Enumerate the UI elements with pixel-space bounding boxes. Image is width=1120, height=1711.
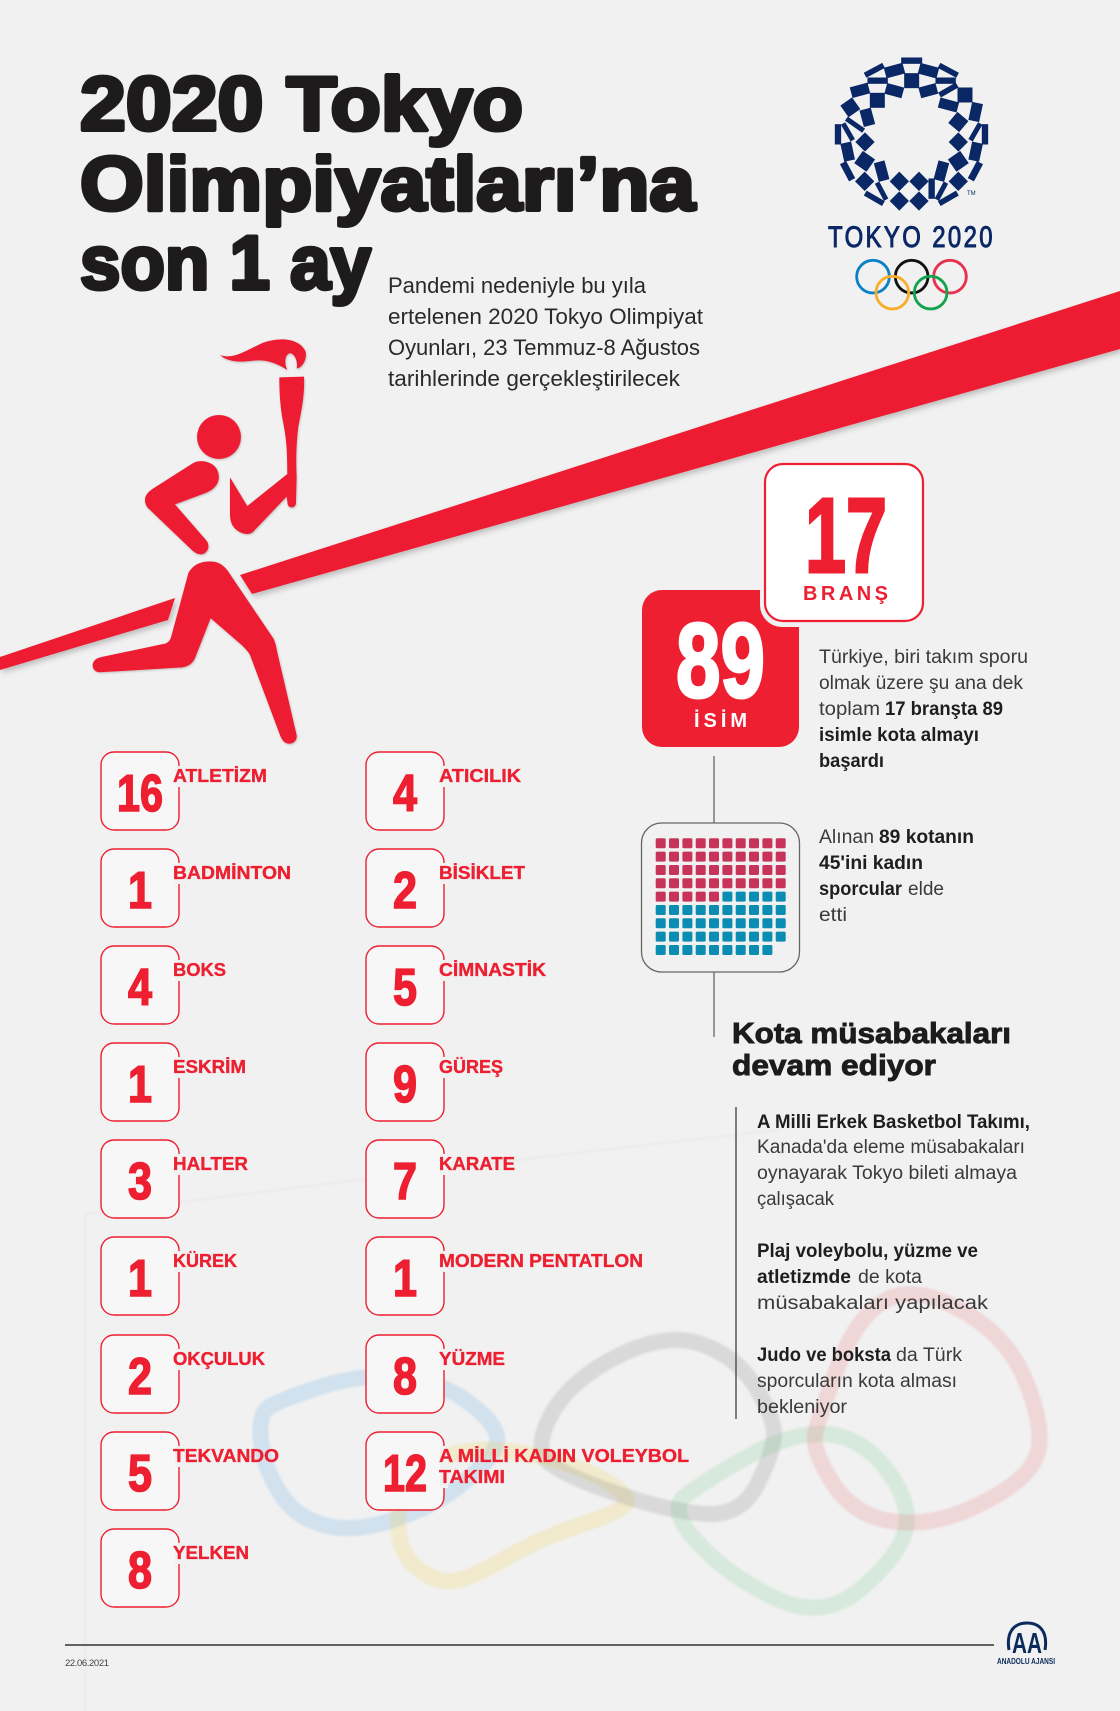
text: quota summary: başardı	[819, 751, 884, 772]
stat card: 17 branş: 17	[805, 477, 887, 595]
icon: olympic rings	[857, 260, 966, 309]
text: quota summary: olmak üzere şu ana dek	[819, 673, 1023, 694]
branch row: yelken	[101, 1529, 249, 1607]
text: qualifiers: A Milli Erkek Basketbol Takımı,	[757, 1112, 1030, 1133]
stat card: 89 isim	[642, 590, 799, 747]
branch row: halter: HALTER	[173, 1154, 248, 1174]
branch row: yelken: YELKEN	[173, 1543, 249, 1563]
stat card: 17 branş	[760, 458, 929, 627]
text: women athletes	[819, 827, 974, 926]
text: women athletes: 89 kotanın	[879, 827, 974, 848]
text: women athletes: 45'ini kadın	[819, 853, 923, 874]
logo: Tokyo 2020	[828, 58, 995, 309]
title	[80, 62, 696, 306]
branch row: güreş: GÜREŞ	[439, 1057, 503, 1077]
branch row: okçuluk	[101, 1335, 265, 1413]
branch row: yüzme: 8	[393, 1348, 417, 1406]
branch row: kürek: 1	[128, 1250, 152, 1308]
intro text: ertelenen 2020 Tokyo Olimpiyat	[388, 304, 703, 329]
text: women athletes: etti	[819, 905, 847, 926]
connector line	[713, 756, 715, 1037]
intro text	[388, 273, 703, 391]
stat card: 89 isim: İSİM	[694, 709, 747, 732]
heading: kota müsabakaları: Kota müsabakaları	[732, 1018, 1011, 1050]
branch row: a milli kadın voleybol takımı: 12	[383, 1445, 427, 1503]
wordmark: TOKYO 2020	[828, 221, 995, 254]
intro text: tarihlerinde gerçekleştirilecek	[388, 366, 681, 391]
vertical divider	[735, 1107, 737, 1419]
diagonal red stripe	[0, 291, 1120, 670]
branch row: atıcılık	[366, 752, 521, 830]
branch row: a milli kadın voleybol takımı	[366, 1432, 689, 1510]
branch row: yüzme: YÜZME	[439, 1349, 505, 1369]
branch row: okçuluk: 2	[128, 1348, 152, 1406]
intro text: Oyunları, 23 Temmuz-8 Ağustos	[388, 335, 700, 360]
branch row: boks: 4	[128, 959, 152, 1017]
branch row: badminton: 1	[128, 862, 152, 920]
branch row: modern pentatlon: 1	[393, 1250, 417, 1308]
text: quota summary	[819, 647, 1028, 772]
branch row: cimnastik	[366, 946, 546, 1024]
branch row: kürek	[101, 1237, 237, 1315]
branch row: bisiklet: BİSİKLET	[439, 863, 525, 883]
branch row: cimnastik: 5	[393, 959, 417, 1017]
branch row: atıcılık: 4	[393, 765, 417, 823]
text: women athletes: elde	[908, 879, 944, 900]
date: 22.06.2021	[65, 1658, 109, 1669]
branch row: kürek: KÜREK	[173, 1251, 237, 1271]
text: quota summary: 17 branşta 89	[885, 699, 1003, 720]
stat card: 89 isim: 89	[676, 602, 765, 720]
text: qualifiers: oynayarak Tokyo bileti almaya	[757, 1163, 1017, 1184]
branch row: a milli kadın voleybol takımı: A MİLLİ KADIN VOLEYBOL	[439, 1446, 689, 1466]
title: Olimpiyatları’na	[80, 142, 696, 227]
branch row: eskrim: ESKRİM	[173, 1057, 246, 1077]
branch row: atıcılık: ATICILIK	[439, 766, 521, 786]
watermark: olympic rings in the background	[85, 1130, 1039, 1711]
text: qualifiers: bekleniyor	[757, 1397, 848, 1418]
title: son 1 ay	[80, 221, 371, 306]
waffle chart: 89 quotas, 45 women	[642, 823, 800, 972]
trademark sign: TM	[967, 191, 976, 197]
text: qualifiers: atletizmde	[757, 1267, 851, 1288]
text: qualifiers	[757, 1112, 1030, 1418]
branch row: a milli kadın voleybol takımı: TAKIMI	[439, 1467, 505, 1487]
intro text: Pandemi nedeniyle bu yıla	[388, 273, 647, 298]
branch row: badminton: BADMİNTON	[173, 863, 291, 883]
text: qualifiers: da Türk	[896, 1345, 963, 1366]
branch row: eskrim: 1	[128, 1056, 152, 1114]
branch row: modern pentatlon	[366, 1237, 643, 1315]
logo: Anadolu Ajansı: ANADOLU AJANSI	[997, 1656, 1055, 1666]
branch row: yüzme	[366, 1335, 505, 1413]
text: quota summary: isimle kota almayı	[819, 725, 979, 746]
branch row: atletizm: 16	[117, 765, 163, 823]
branch row: boks: BOKS	[173, 960, 226, 980]
title: 2020 Tokyo	[80, 62, 523, 147]
branch row: atletizm: ATLETİZM	[173, 766, 267, 786]
branch row: karate: 7	[393, 1153, 417, 1211]
text: qualifiers: çalışacak	[757, 1189, 834, 1210]
branch row: güreş: 9	[393, 1056, 417, 1114]
branch row: tekvando: TEKVANDO	[173, 1446, 279, 1466]
branch row: halter	[101, 1140, 248, 1218]
text: women athletes: Alınan	[819, 827, 874, 848]
branch row: atletizm	[101, 752, 267, 830]
branch row: halter: 3	[128, 1153, 152, 1211]
text: qualifiers: de kota	[858, 1267, 922, 1288]
branch row: yelken: 8	[128, 1542, 152, 1600]
text: qualifiers: sporcuların kota alması	[757, 1371, 957, 1392]
icon: torch runner	[93, 339, 306, 744]
branch row: tekvando	[101, 1432, 279, 1510]
logo: Anadolu Ajansı	[997, 1623, 1055, 1666]
text: women athletes: sporcular	[819, 879, 903, 900]
branch row: bisiklet: 2	[393, 862, 417, 920]
branch row: güreş	[366, 1043, 503, 1121]
text: qualifiers: Plaj voleybolu, yüzme ve	[757, 1241, 978, 1262]
text: quota summary: toplam	[819, 699, 880, 720]
branch row: eskrim	[101, 1043, 246, 1121]
branch row: okçuluk: OKÇULUK	[173, 1349, 265, 1369]
text: qualifiers: Kanada'da eleme müsabakaları	[757, 1137, 1025, 1158]
branch row: cimnastik: CİMNASTİK	[439, 960, 546, 980]
stat card: 17 branş: BRANŞ	[803, 583, 888, 605]
heading: kota müsabakaları: devam ediyor	[732, 1050, 936, 1082]
heading: kota müsabakaları	[732, 1018, 1011, 1082]
branch row: bisiklet	[366, 849, 525, 927]
text: qualifiers: müsabakaları yapılacak	[757, 1293, 989, 1314]
branch row: modern pentatlon: MODERN PENTATLON	[439, 1251, 643, 1271]
footer rule	[65, 1644, 994, 1646]
branch row: boks	[101, 946, 226, 1024]
text: qualifiers: Judo ve boksta	[757, 1345, 891, 1366]
branch row: karate	[366, 1140, 515, 1218]
branch row: tekvando: 5	[128, 1445, 152, 1503]
text: quota summary: Türkiye, biri takım sporu	[819, 647, 1028, 668]
branch row: badminton	[101, 849, 291, 927]
logo: Anadolu Ajansı: AA	[1012, 1628, 1042, 1660]
icon: checkered emblem	[835, 58, 988, 210]
branch row: karate: KARATE	[439, 1154, 515, 1174]
